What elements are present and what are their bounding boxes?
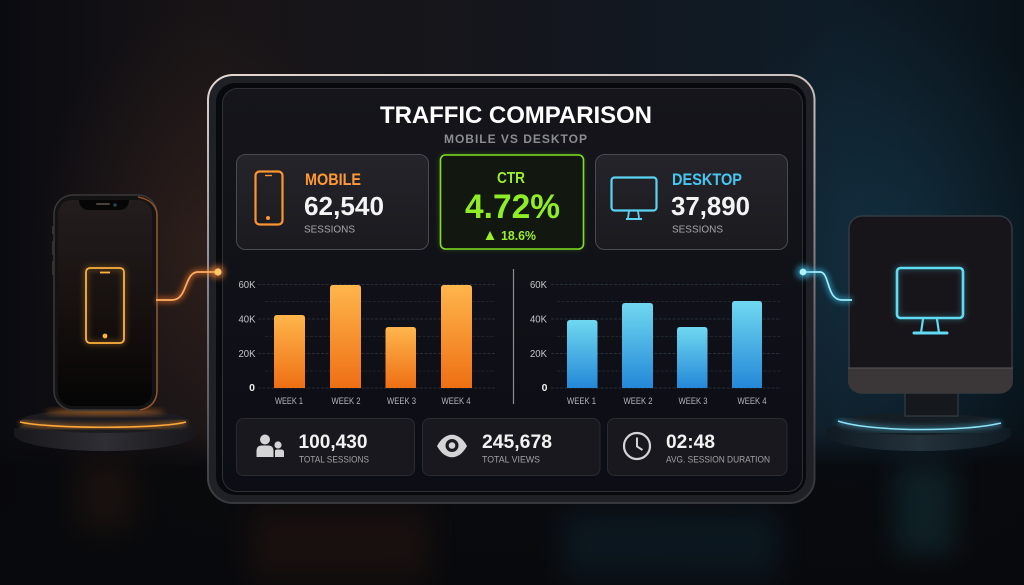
subtitle: MOBILE VS DESKTOP: [444, 132, 587, 146]
bars: [274, 285, 472, 388]
week labels: WEEK 4: [738, 396, 766, 407]
bars: [567, 301, 762, 388]
label: CTR: CTR: [497, 170, 525, 187]
value: CTR: 4.72%: [465, 188, 560, 226]
value: desktop sessions: 37,890: [671, 191, 750, 221]
value: total views: 245,678: [482, 432, 552, 453]
caption: duration: AVG. SESSION DURATION: [666, 454, 770, 466]
axis labels: 20K: [238, 348, 256, 360]
week labels: WEEK 3: [387, 396, 416, 407]
stat: total views: [422, 418, 600, 476]
axis labels: [238, 279, 256, 394]
axis labels: 20K: [530, 348, 547, 360]
axis labels: [530, 279, 548, 394]
week labels: WEEK 4: [442, 396, 470, 407]
axis labels: 60K: [238, 279, 256, 291]
icon: clock: [624, 433, 650, 459]
axis labels: 60K: [530, 279, 547, 291]
caption: desktop sessions: SESSIONS: [672, 224, 723, 236]
label: desktop: DESKTOP: [672, 171, 742, 189]
icon: desktop monitor: [612, 178, 656, 219]
axis labels: 40K: [530, 314, 547, 326]
value: total sessions: 100,430: [298, 432, 368, 453]
value: duration: 02:48: [666, 432, 715, 453]
title: TRAFFIC COMPARISON: [380, 102, 652, 129]
week labels: [275, 396, 470, 407]
mobile phone device: [52, 195, 157, 410]
caption: total views: TOTAL VIEWS: [482, 454, 540, 466]
desktop monitor device: [848, 216, 1013, 416]
icon: mobile phone: [256, 172, 282, 224]
value: mobile sessions: 62,540: [304, 191, 384, 221]
stat: total sessions: [236, 418, 414, 476]
card: CTR: [440, 155, 584, 249]
stat: average session duration: [608, 418, 787, 476]
icon: users: [256, 434, 284, 457]
connector: panel to monitor: [796, 265, 852, 300]
card: desktop: [596, 154, 788, 250]
bar chart: desktop: [530, 279, 781, 407]
week labels: WEEK 2: [332, 396, 360, 407]
phone notch: [79, 200, 129, 210]
week labels: [567, 396, 766, 407]
label: mobile: MOBILE: [305, 171, 361, 189]
caption: mobile sessions: SESSIONS: [304, 224, 355, 236]
icon: glowing phone: [86, 268, 124, 343]
card: mobile: [236, 154, 428, 250]
axis labels: 40K: [238, 314, 256, 326]
change: CTR: 18.6%: [501, 229, 536, 243]
caption: total sessions: TOTAL SESSIONS: [299, 454, 369, 466]
week labels: WEEK 3: [678, 396, 708, 407]
bar chart: mobile: [238, 279, 495, 407]
dashboard panel: [208, 75, 814, 503]
week labels: WEEK 1: [567, 396, 596, 407]
week labels: WEEK 2: [624, 396, 652, 407]
icon: eye: [437, 435, 467, 457]
desktop pedestal: [827, 413, 1011, 451]
axis labels: 0: [249, 382, 255, 394]
mobile pedestal: [14, 409, 196, 451]
connector: phone to panel: [156, 265, 225, 300]
icon: glowing monitor: [897, 268, 963, 333]
week labels: WEEK 1: [275, 396, 303, 407]
change: CTR: [486, 229, 536, 243]
axis labels: 0: [542, 382, 548, 394]
